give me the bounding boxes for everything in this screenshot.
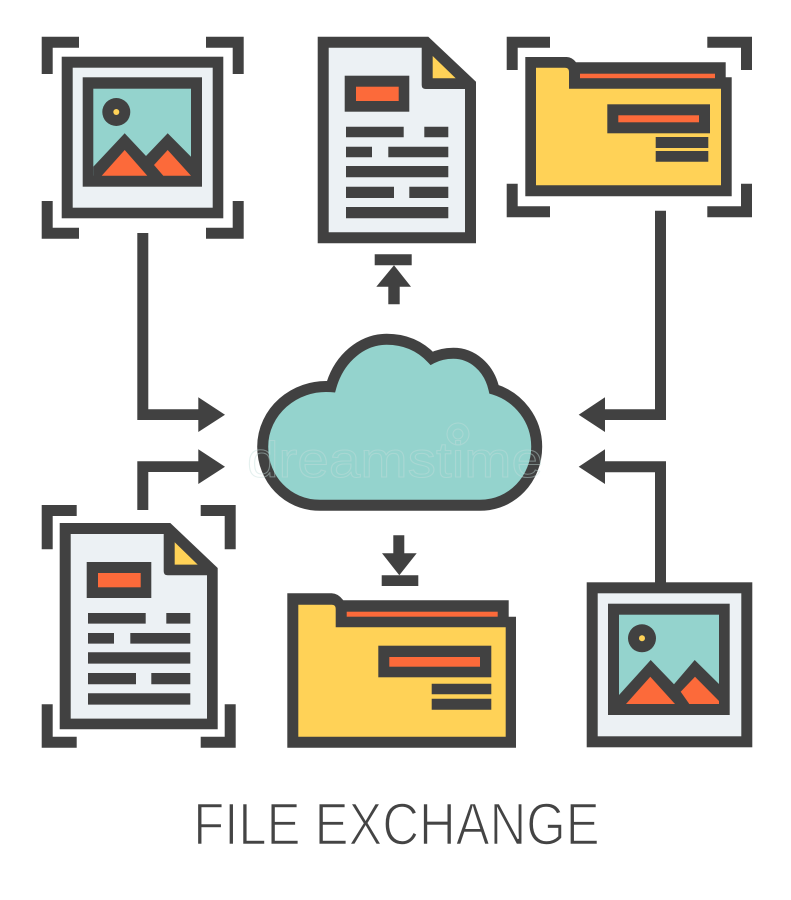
folder text lines (432, 684, 491, 710)
mountains (619, 660, 719, 704)
photo frame (62, 57, 223, 218)
arrow: folder to cloud (579, 211, 666, 432)
document heading (87, 562, 151, 598)
folder text lines (656, 137, 708, 162)
sun (102, 98, 130, 126)
panel: lower-right image file (587, 582, 752, 747)
folder label (378, 646, 491, 677)
arrow: image to cloud (137, 233, 225, 432)
watermark: dreamstime (247, 432, 543, 488)
arrow: upload to document (375, 254, 412, 304)
folded corner (175, 542, 198, 565)
focus brackets (512, 42, 746, 212)
folded corner (433, 56, 456, 78)
title: FILE EXCHANGE (193, 792, 600, 858)
cloud (263, 339, 537, 505)
arrow: lower-right image to cloud (579, 449, 666, 584)
mountains (93, 133, 191, 176)
focus brackets (47, 42, 238, 233)
panel: bottom folder (287, 593, 516, 748)
arrow: lower-left document to cloud (137, 449, 225, 510)
document sheet (60, 523, 218, 729)
folder label (607, 104, 710, 133)
panel: top-right folder (512, 42, 746, 212)
sun (628, 624, 656, 652)
folder body (287, 593, 516, 748)
text lines (88, 613, 190, 705)
photo frame (587, 582, 752, 747)
folder tab line (347, 612, 498, 617)
folder tab line (580, 74, 715, 78)
text lines (346, 127, 448, 218)
document sheet (318, 37, 476, 243)
document heading (345, 76, 409, 112)
panel: top document (318, 37, 476, 243)
arrow: cloud down to folder (382, 535, 418, 586)
panel: top-left image file (47, 42, 238, 233)
folder body (525, 57, 732, 196)
focus brackets (47, 510, 230, 742)
panel: lower-left document (47, 510, 230, 742)
